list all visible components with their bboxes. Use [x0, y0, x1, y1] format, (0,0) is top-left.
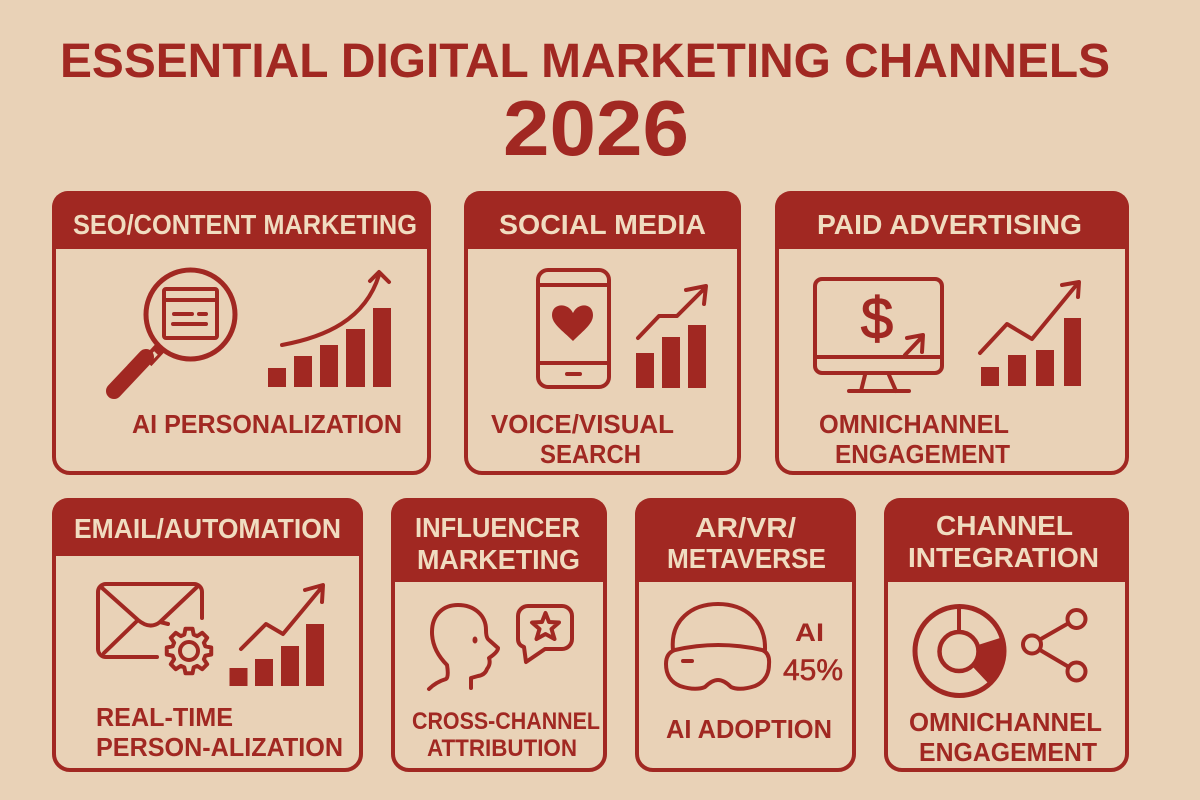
icon: donut chart	[915, 606, 1004, 696]
panel: Influencer Marketing	[391, 498, 607, 770]
label: AI PERSONALIZATION	[132, 411, 402, 439]
chart: growth bars and arrow	[636, 286, 706, 388]
icon: share nodes	[1023, 610, 1086, 680]
label: REAL-TIME	[96, 704, 233, 732]
panel: Paid Advertising	[775, 191, 1129, 473]
title: 2026	[503, 84, 689, 172]
chart: growth bars and arrow	[230, 585, 324, 686]
heading: Social Media: SOCIAL MEDIA	[499, 209, 706, 240]
icon: magnifier over document	[114, 270, 235, 391]
panel: Channel Integration: INTEGRATION	[908, 542, 1099, 573]
icon: monitor with dollar: $	[861, 286, 893, 351]
heading: Influencer Marketing: INFLUENCER	[415, 512, 580, 543]
label: CROSS-CHANNEL	[412, 708, 600, 735]
panel: Influencer Marketing: MARKETING	[417, 544, 580, 575]
icon: VR headset	[666, 604, 769, 689]
panel: AR/VR/Metaverse: METAVERSE	[667, 543, 826, 574]
icon: monitor with dollar	[815, 279, 942, 391]
panel: AR/VR/Metaverse	[635, 498, 856, 770]
heading: Paid Advertising: PAID ADVERTISING	[817, 209, 1082, 240]
chart: growth bars and arrow	[268, 272, 391, 387]
title	[60, 35, 1110, 172]
panel: SEO/Content Marketing	[52, 191, 431, 473]
panel: Paid Advertising: ENGAGEMENT	[835, 441, 1010, 469]
heading: AR/VR/Metaverse: AR/VR/	[695, 512, 796, 543]
icon: phone with heart	[538, 270, 609, 387]
panel: Channel Integration	[884, 498, 1129, 770]
label: OMNICHANNEL	[819, 411, 1009, 439]
panel: Channel Integration: ENGAGEMENT	[919, 739, 1097, 767]
stat: AI 45%: AI	[795, 619, 824, 647]
panel: Influencer Marketing: ATTRIBUTION	[427, 735, 577, 762]
heading: SEO: SEO/CONTENT MARKETING	[73, 209, 417, 240]
icon: speech bubble with star	[518, 606, 572, 662]
label: OMNICHANNEL	[909, 709, 1102, 737]
panel: Email/Automation: PERSON-ALIZATION	[96, 734, 343, 762]
label: AI ADOPTION	[666, 716, 832, 744]
chart: growth bars and arrow	[980, 282, 1081, 386]
icon: head profile	[429, 605, 498, 689]
stat: AI 45%: 45%	[783, 654, 843, 687]
panel: Social Media	[464, 191, 741, 473]
heading: Email/Automation: EMAIL/AUTOMATION	[74, 513, 341, 544]
title: ESSENTIAL DIGITAL MARKETING CHANNELS	[60, 35, 1110, 88]
heading: Channel Integration: CHANNEL	[936, 510, 1073, 541]
panel: Social Media: SEARCH	[540, 441, 641, 469]
stat: AI 45%	[783, 619, 843, 687]
icon: envelope with gear	[98, 584, 211, 673]
label: VOICE/VISUAL	[491, 411, 674, 439]
panel: Email/Automation	[52, 498, 363, 770]
